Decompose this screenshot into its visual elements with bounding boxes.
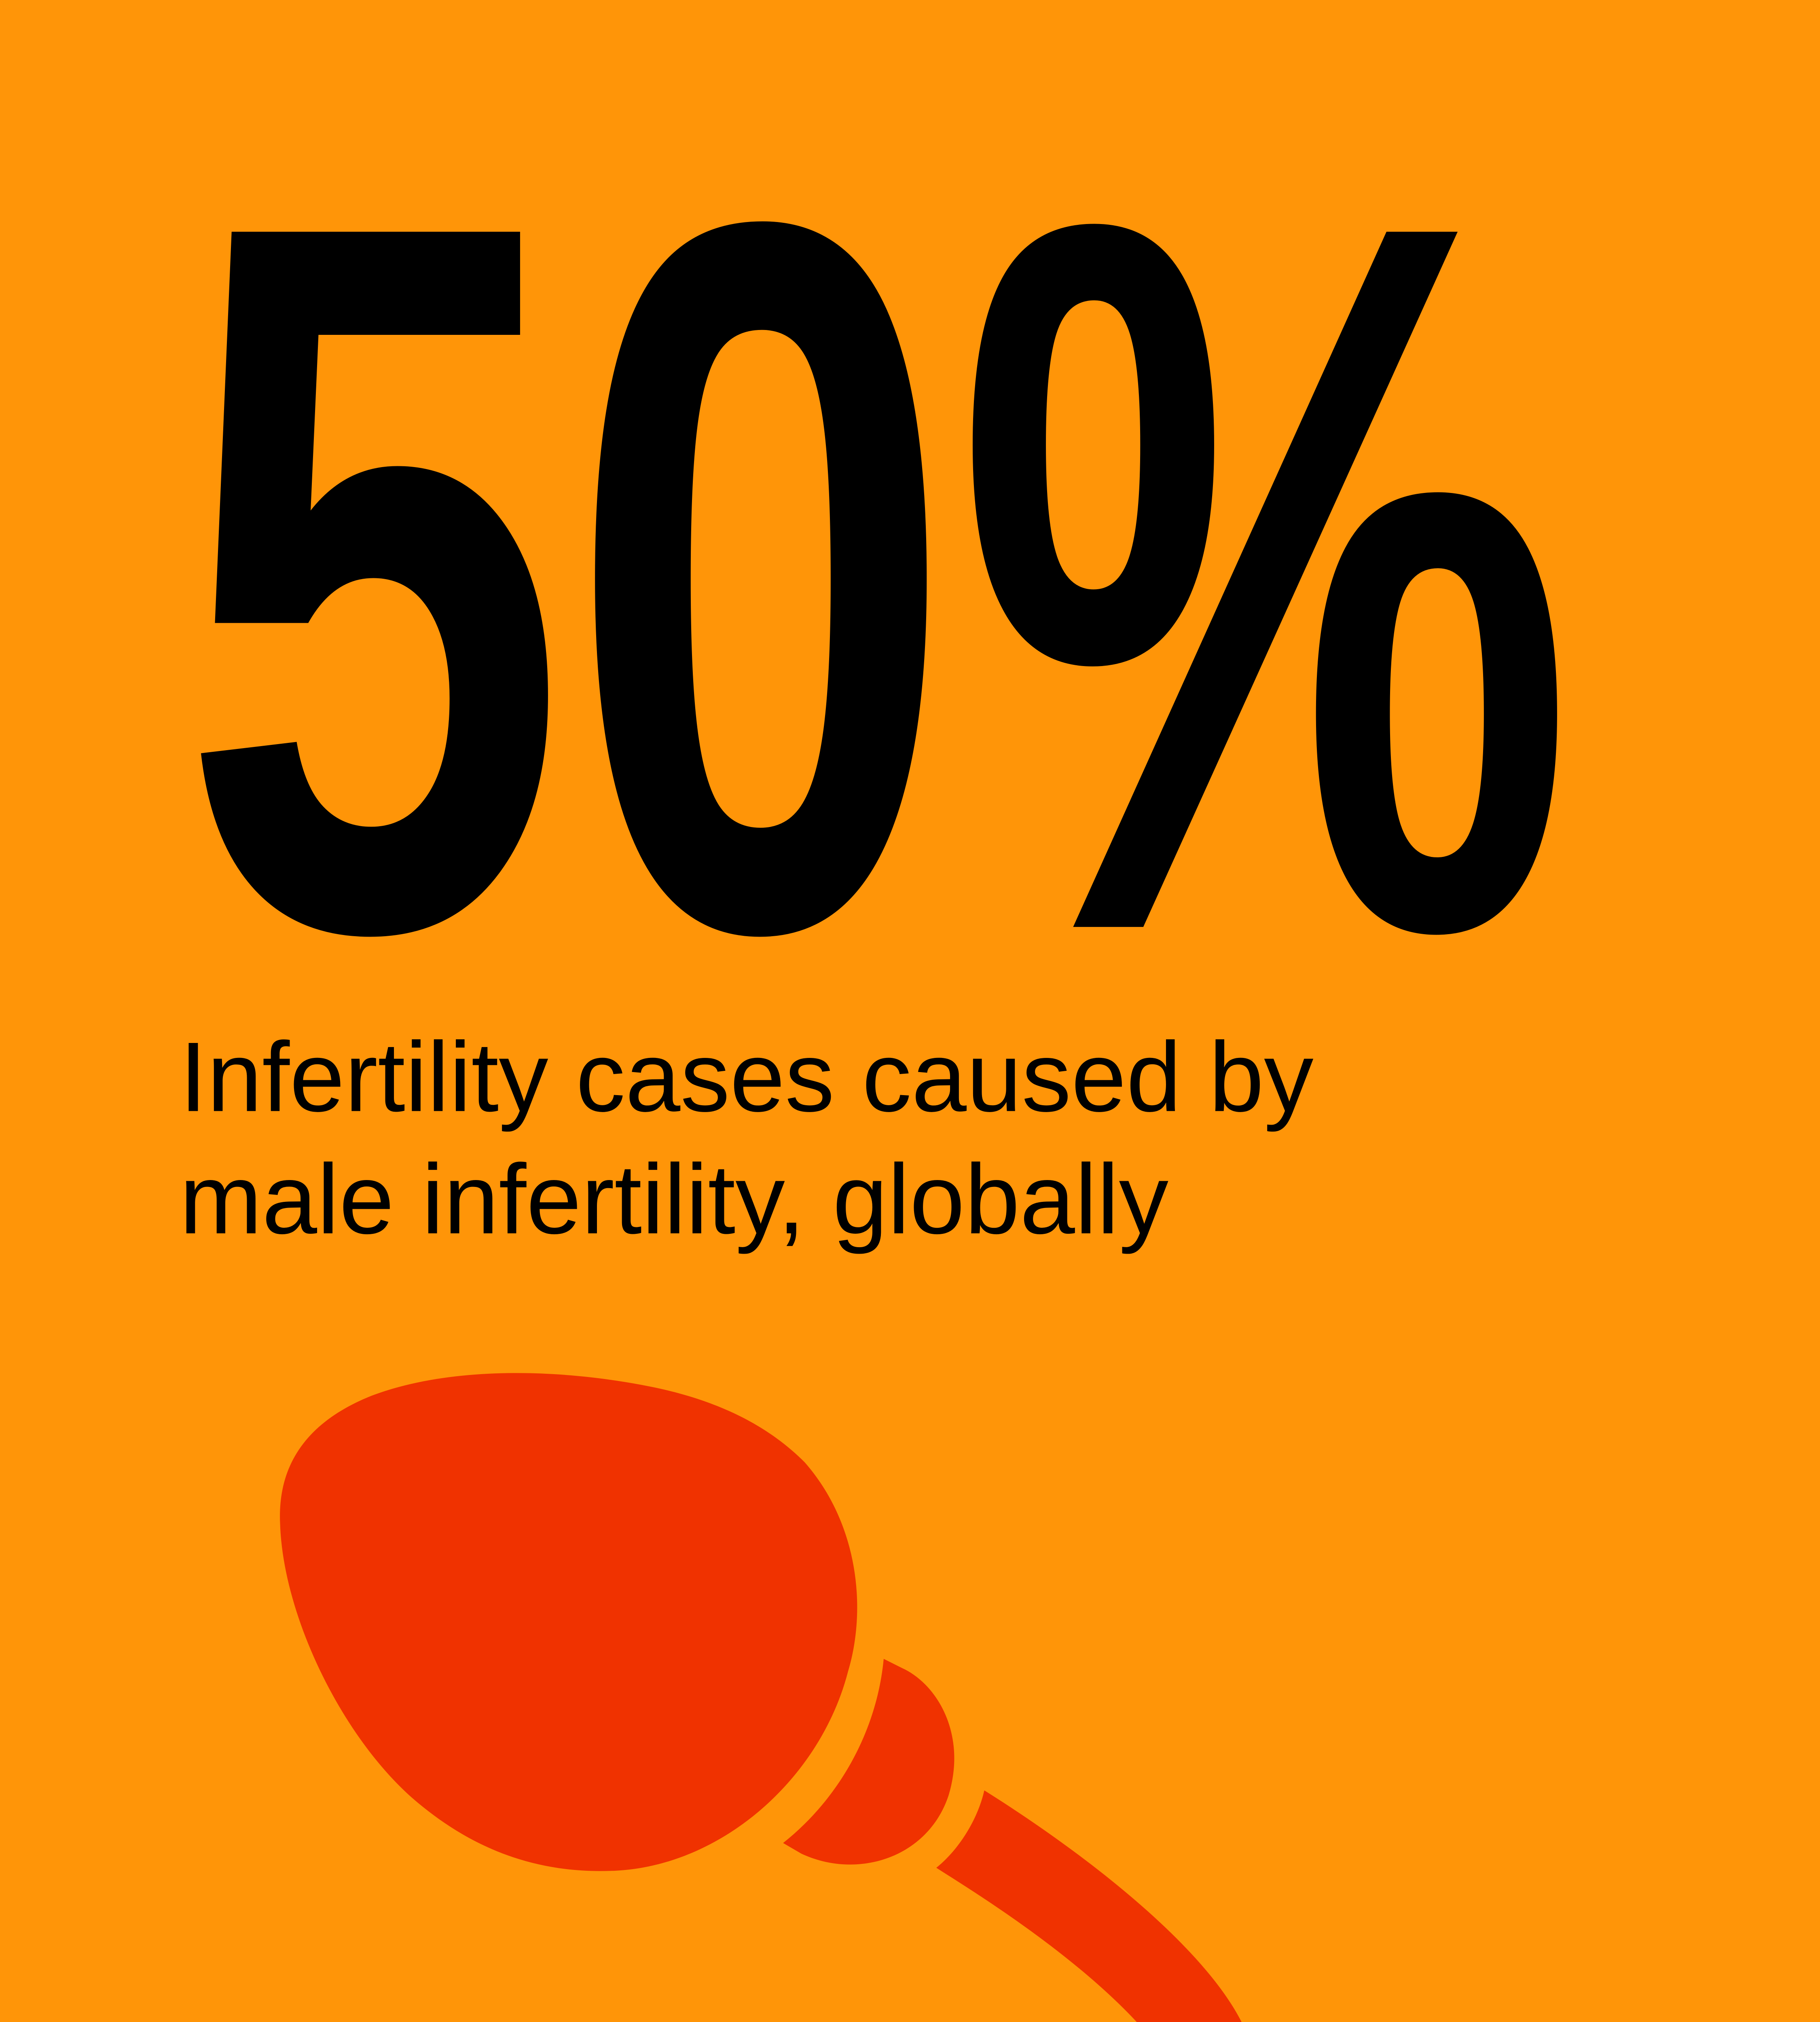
subtitle text block: Infertility cases caused by	[180, 1021, 1314, 1132]
sperm neck	[783, 1659, 954, 1865]
sperm tail	[936, 1790, 1672, 2022]
sperm head	[280, 1373, 857, 1871]
icon: sperm illustration	[280, 1373, 1672, 2022]
subtitle text block: male infertility, globally	[180, 1144, 1168, 1254]
subtitle text block	[180, 1021, 1314, 1254]
